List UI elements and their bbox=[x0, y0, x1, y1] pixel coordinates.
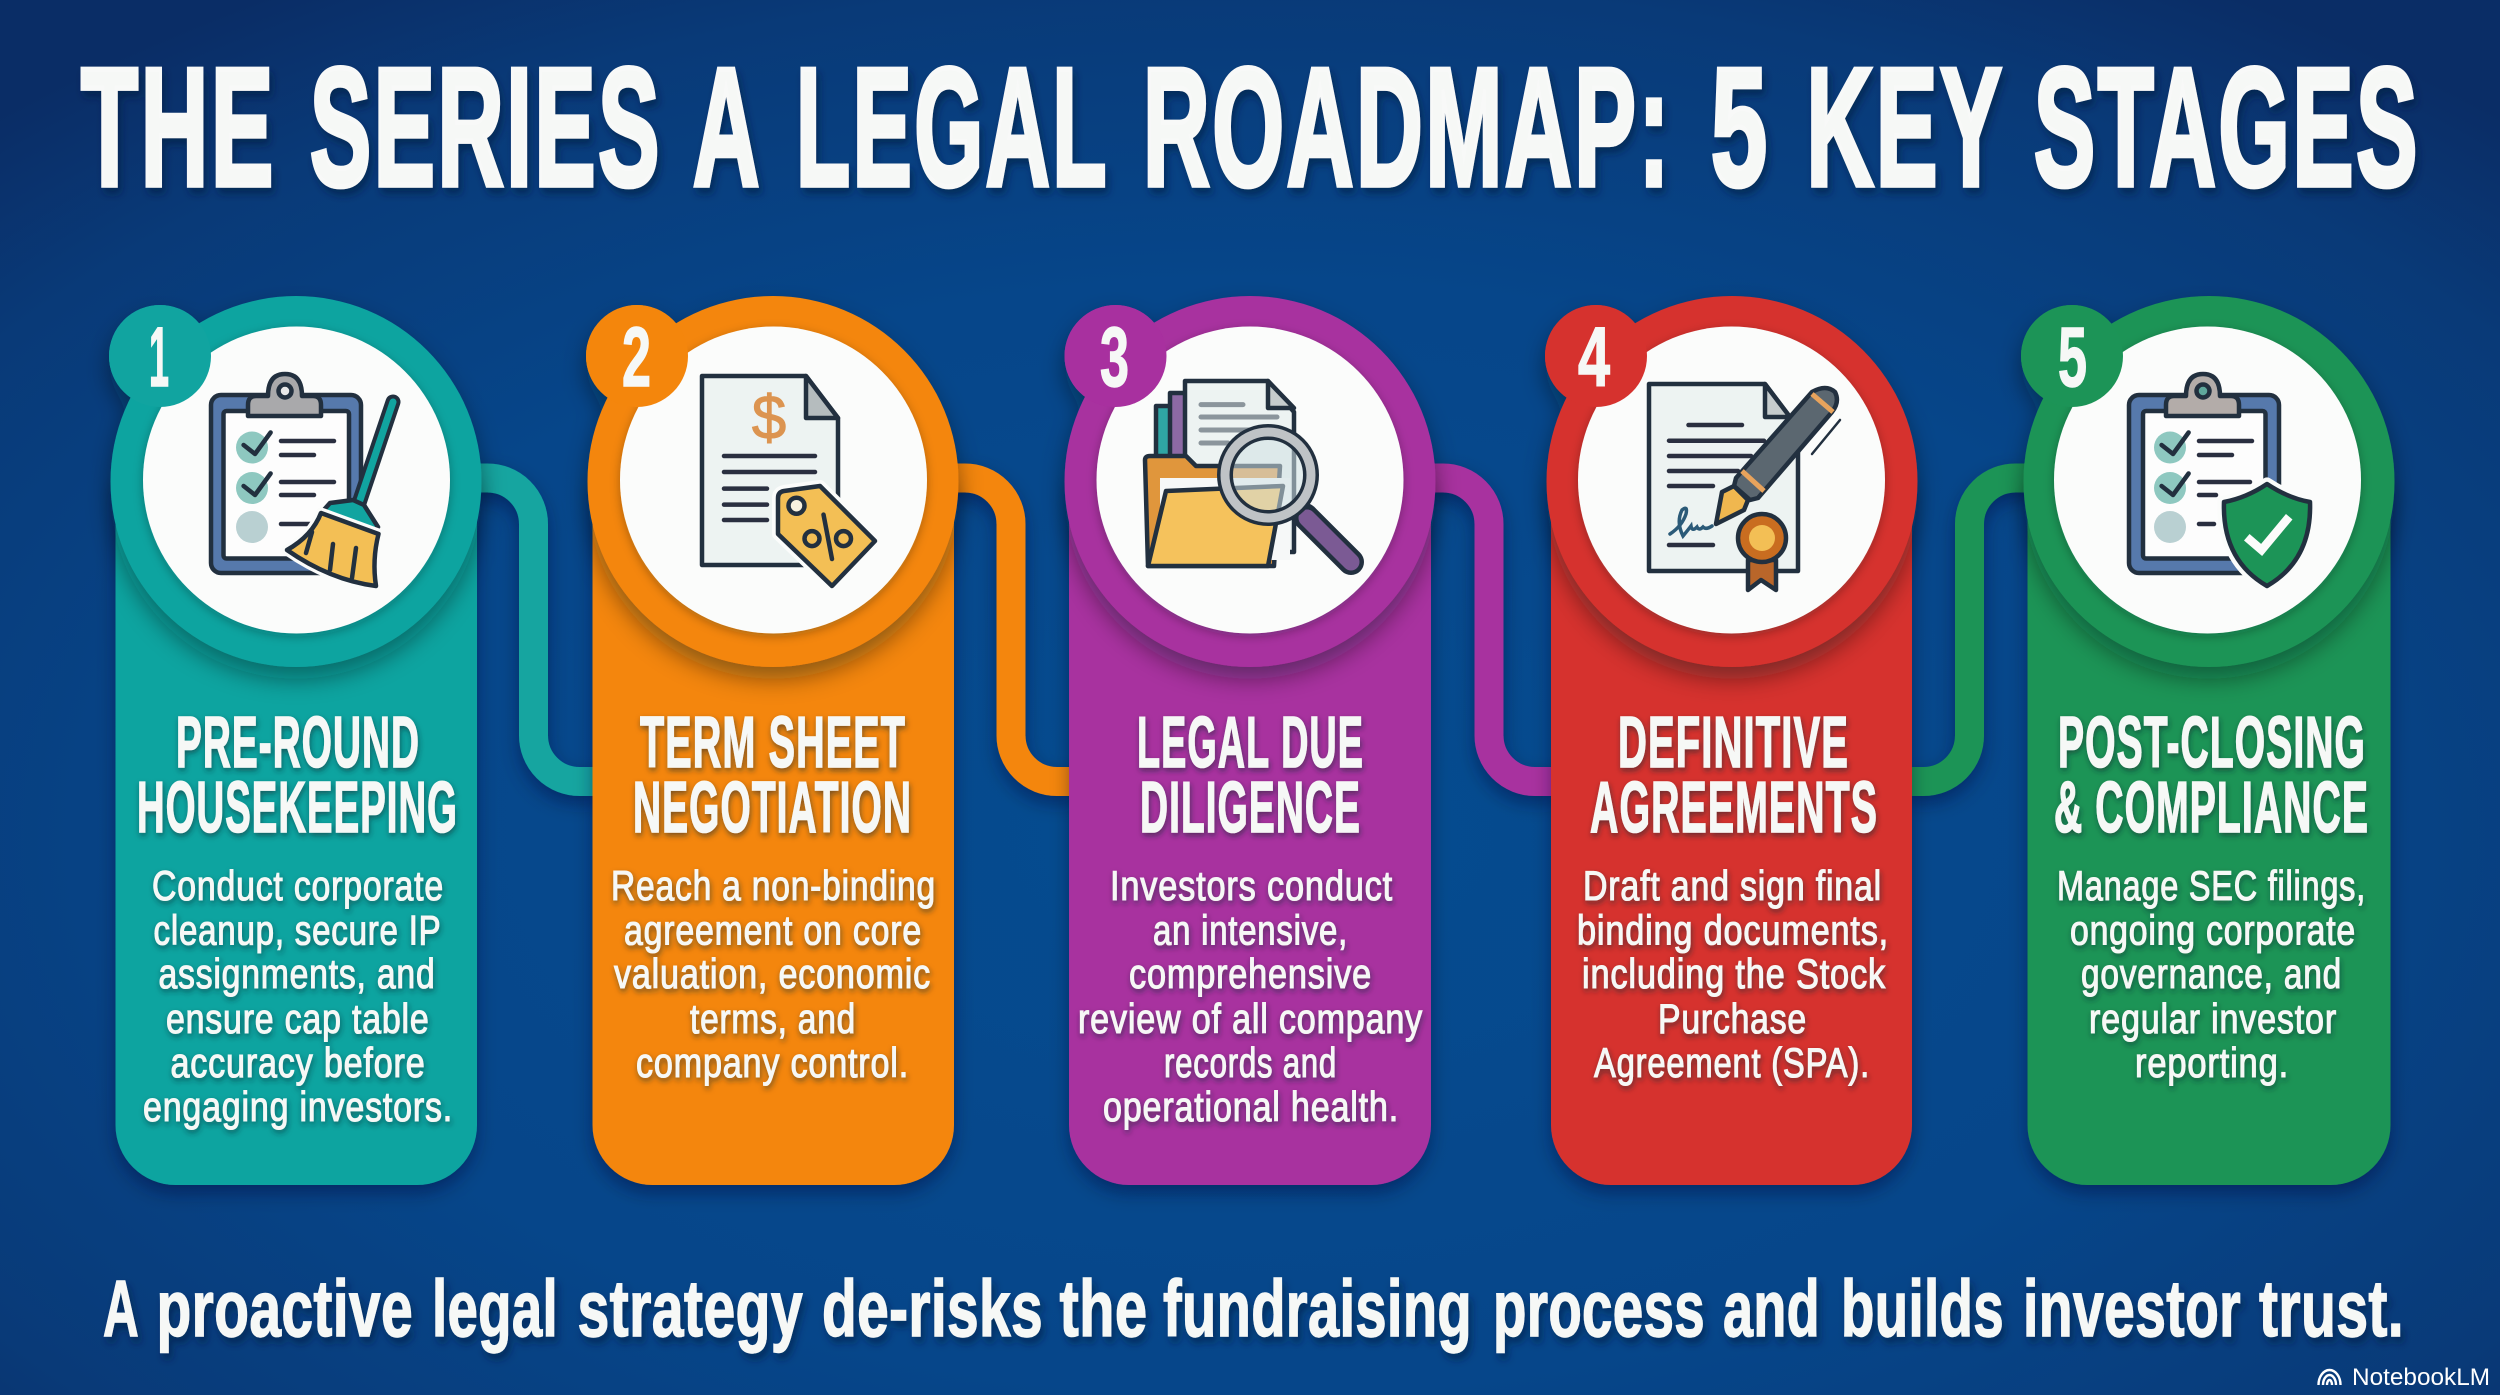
heading: stage 2 bbox=[633, 703, 912, 848]
text block: stage 1: Conduct corporate bbox=[152, 862, 444, 909]
white icon circle bbox=[143, 326, 450, 634]
arrow: connector stage 1 to 2 bbox=[470, 478, 600, 782]
heading: stage 5 bbox=[2054, 703, 2369, 848]
text block: stage 4: binding documents, bbox=[1577, 906, 1889, 954]
text block: stage 1 bbox=[143, 862, 453, 1130]
number badge bbox=[586, 305, 688, 407]
footer tagline: process bbox=[1493, 1264, 1705, 1353]
number 5: 5 bbox=[2058, 310, 2087, 404]
text block: stage 1: cleanup, secure IP bbox=[154, 906, 442, 954]
number 3: 3 bbox=[1100, 310, 1129, 404]
footer tagline: trust. bbox=[2259, 1264, 2404, 1353]
title: A bbox=[693, 33, 762, 221]
heading: stage 2: TERM SHEET bbox=[640, 703, 906, 783]
panel body bbox=[1069, 480, 1431, 1185]
footer tagline bbox=[103, 1264, 2404, 1353]
footer tagline: de-risks bbox=[822, 1264, 1043, 1353]
number badge bbox=[1064, 305, 1166, 407]
arrow: connector stage 3 to 4 bbox=[1426, 478, 1558, 782]
title: THE bbox=[81, 33, 276, 221]
white icon circle bbox=[620, 326, 927, 634]
title: 5 bbox=[1711, 33, 1770, 221]
title: ROADMAP: bbox=[1143, 33, 1672, 221]
heading: stage 4 bbox=[1590, 703, 1878, 848]
stage descriptions bbox=[143, 862, 2366, 1130]
white icon circle bbox=[1578, 326, 1885, 634]
panel: stage 3 legal due diligence bbox=[1064, 296, 1436, 1185]
text block: stage 3: Investors conduct bbox=[1110, 862, 1393, 909]
text block: stage 4: Purchase bbox=[1658, 995, 1807, 1042]
icon: folder and magnifier bbox=[1145, 381, 1351, 566]
icon: clipboard and shield bbox=[2129, 374, 2310, 586]
title bbox=[81, 33, 2420, 221]
stage headings bbox=[137, 703, 2369, 848]
white icon circle bbox=[1096, 326, 1404, 634]
text block: stage 4: including the Stock bbox=[1582, 950, 1886, 997]
watermark text: NotebookLM bbox=[2352, 1364, 2490, 1391]
text block: stage 1: assignments, and bbox=[158, 950, 436, 997]
heading: stage 4: AGREEMENTS bbox=[1590, 768, 1878, 848]
text block: stage 3: review of all company bbox=[1078, 995, 1423, 1042]
footer tagline: A bbox=[103, 1264, 139, 1353]
text block: stage 4: Draft and sign final bbox=[1583, 862, 1882, 909]
panel: stage 2 term sheet negotiation bbox=[586, 296, 958, 1185]
icon: term sheet document and price tag: $ bbox=[752, 384, 786, 453]
heading: stage 3: DILIGENCE bbox=[1140, 768, 1361, 848]
heading: stage 3: LEGAL DUE bbox=[1137, 703, 1364, 783]
panel body bbox=[1551, 480, 1912, 1185]
title: SERIES bbox=[310, 33, 662, 221]
text block: stage 1: ensure cap table bbox=[166, 995, 430, 1042]
text block: stage 4: Agreement (SPA). bbox=[1594, 1039, 1870, 1086]
heading: stage 3 bbox=[1137, 703, 1364, 848]
text block: stage 2: company control. bbox=[636, 1039, 909, 1086]
text block: stage 5: reporting. bbox=[2135, 1039, 2289, 1086]
text block: stage 3 bbox=[1078, 862, 1423, 1130]
heading: stage 4: DEFINITIVE bbox=[1618, 703, 1849, 783]
footer tagline: fundraising bbox=[1163, 1264, 1472, 1353]
icon: term sheet document and price tag bbox=[702, 376, 875, 586]
icon: NotebookLM arches bbox=[2318, 1370, 2340, 1385]
text block: stage 5: governance, and bbox=[2081, 950, 2342, 997]
number badge bbox=[109, 305, 211, 407]
text block: stage 3: operational health. bbox=[1103, 1083, 1399, 1130]
panel body bbox=[592, 480, 954, 1185]
icon holder ring bbox=[109, 296, 482, 667]
number 4: 4 bbox=[1578, 310, 1610, 404]
number 2: 2 bbox=[622, 310, 651, 404]
heading: stage 1: PRE-ROUND bbox=[176, 703, 420, 783]
text block: stage 2: Reach a non-binding bbox=[611, 862, 936, 909]
icon: signed contract, pen and seal bbox=[1649, 384, 1840, 590]
title: LEGAL bbox=[796, 33, 1109, 221]
footer tagline: proactive bbox=[156, 1264, 413, 1353]
text block: stage 5: Manage SEC filings, bbox=[2057, 862, 2366, 909]
footer tagline: the bbox=[1060, 1264, 1148, 1353]
text block: stage 2: terms, and bbox=[690, 995, 856, 1042]
text block: stage 2 bbox=[611, 862, 936, 1086]
text block: stage 5: ongoing corporate bbox=[2070, 906, 2356, 954]
footer tagline: investor bbox=[2023, 1264, 2241, 1353]
footer tagline: builds bbox=[1841, 1264, 2004, 1353]
panel body bbox=[116, 480, 477, 1185]
panel: stage 1 pre-round housekeeping: 1 bbox=[149, 310, 169, 404]
panel body bbox=[2028, 480, 2390, 1185]
text block: stage 2: valuation, economic bbox=[614, 950, 931, 997]
panel: stage 1 pre-round housekeeping bbox=[109, 296, 482, 1185]
text block: stage 2: agreement on core bbox=[624, 906, 922, 954]
text block: stage 4 bbox=[1577, 862, 1889, 1086]
number badge bbox=[1545, 305, 1647, 407]
text block: stage 5: regular investor bbox=[2089, 995, 2337, 1042]
icon holder ring bbox=[586, 296, 958, 667]
icon holder ring bbox=[1064, 296, 1436, 667]
number badge bbox=[2021, 305, 2123, 407]
heading: stage 1: HOUSEKEEPING bbox=[137, 768, 458, 848]
text block: stage 1: accuracy before bbox=[170, 1039, 426, 1086]
white icon circle bbox=[2054, 326, 2361, 634]
arrow: connector stage 4 to 5 bbox=[1905, 478, 2032, 782]
icon: clipboard and broom bbox=[211, 374, 393, 586]
title: KEY bbox=[1806, 33, 2004, 221]
footer tagline: legal bbox=[432, 1264, 558, 1353]
footer tagline: strategy bbox=[578, 1264, 803, 1353]
panel: stage 4 definitive agreements bbox=[1545, 296, 1918, 1185]
heading: stage 2: NEGOTIATION bbox=[633, 768, 912, 848]
text block: stage 3: records and bbox=[1164, 1039, 1337, 1086]
footer tagline: and bbox=[1723, 1264, 1820, 1353]
icon holder ring bbox=[1545, 296, 1918, 667]
text block: stage 5 bbox=[2057, 862, 2366, 1086]
heading: stage 1 bbox=[137, 703, 458, 848]
text block: stage 1: engaging investors. bbox=[143, 1083, 453, 1130]
text block: stage 3: an intensive, bbox=[1153, 906, 1348, 954]
arrow: connector stage 2 to 3 bbox=[948, 478, 1075, 782]
watermark: NotebookLM bbox=[2318, 1364, 2490, 1391]
icon holder ring bbox=[2021, 296, 2394, 667]
panel: stage 5 post-closing and compliance bbox=[2021, 296, 2394, 1185]
text block: stage 3: comprehensive bbox=[1129, 950, 1372, 997]
connectors between stages bbox=[470, 478, 2032, 782]
